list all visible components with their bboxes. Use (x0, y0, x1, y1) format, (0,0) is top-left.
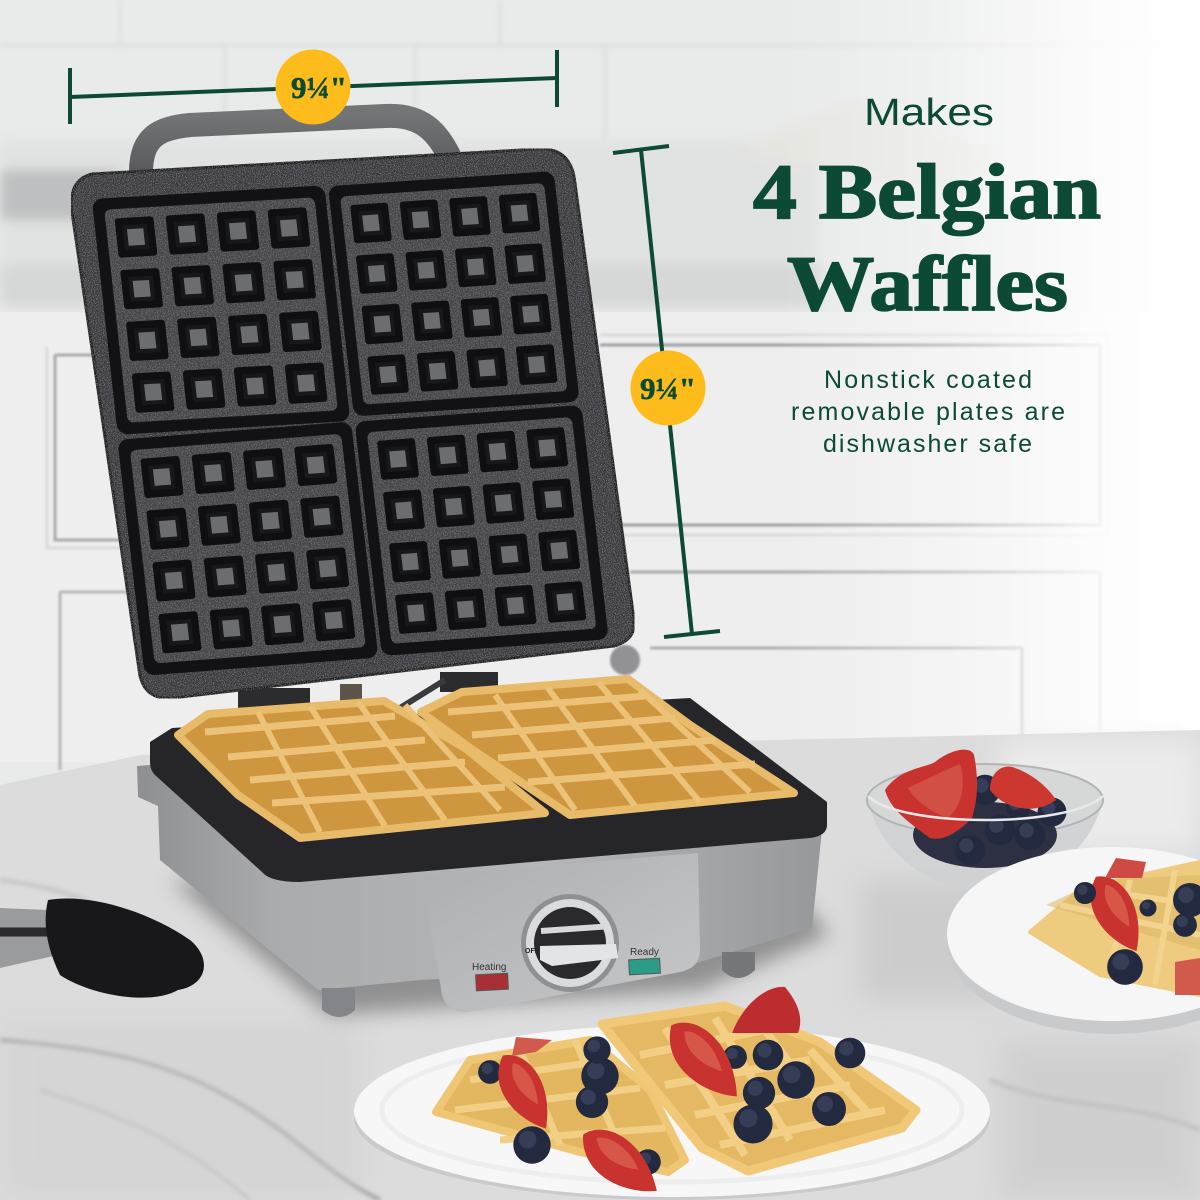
badge: height 9 1/4 inch (630, 350, 706, 426)
right plate with waffle (947, 847, 1200, 1034)
front plate with waffles (354, 987, 990, 1200)
body text: dishwasher safe plates: dishwasher safe (823, 430, 1032, 458)
dial (521, 894, 619, 992)
heating light: Heating (472, 962, 506, 973)
badge: width 9 1/4 inch: 9¼" (291, 70, 347, 105)
horizontal dimension (70, 50, 557, 124)
open top plate (71, 149, 634, 698)
base dark rim (150, 698, 827, 882)
body text: dishwasher safe plates (791, 366, 1065, 458)
heading: Makes 4 Belgian Waffles (753, 92, 1101, 327)
badge: width 9 1/4 inch (276, 50, 350, 124)
waffle grid: top left (92, 185, 350, 435)
right waffle (421, 679, 794, 815)
body text: dishwasher safe plates: removable plates are (791, 398, 1065, 426)
tongs (0, 899, 204, 998)
waffle grid: bottom right (355, 405, 609, 656)
ready light: Ready (630, 947, 659, 958)
base silver body (137, 765, 822, 990)
body text: dishwasher safe plates: Nonstick coated (824, 366, 1032, 394)
marble countertop (0, 730, 1200, 1200)
dial: OFF (525, 948, 540, 955)
handle (141, 116, 452, 172)
right front waffle (602, 1006, 916, 1171)
waffle maker (71, 116, 827, 1017)
heating light (472, 962, 508, 991)
counter ledge (0, 100, 1010, 307)
ready light (629, 947, 660, 975)
kitchen background wall (0, 0, 1200, 800)
heading: Makes 4 Belgian Waffles: Waffles (787, 240, 1068, 327)
waffle grid: top right (328, 171, 580, 416)
left waffle (178, 701, 545, 838)
strawberries (481, 987, 800, 1195)
badge: height 9 1/4 inch: 9¼" (640, 371, 696, 406)
shadow under waffle maker (170, 880, 830, 1015)
left front waffle (436, 1040, 685, 1172)
hinges (238, 672, 498, 708)
vertical dimension (613, 146, 720, 637)
heading: Makes 4 Belgian Waffles: 4 Belgian (753, 148, 1101, 235)
heading: Makes 4 Belgian Waffles: Makes (864, 92, 994, 134)
white fade overlay on right side (780, 0, 1200, 740)
waffle grid: bottom left (117, 422, 378, 676)
control panel (422, 853, 700, 1012)
bowl of berries (867, 750, 1103, 892)
feet (322, 952, 755, 1017)
white cabinets (0, 312, 1200, 762)
berries (478, 1036, 865, 1175)
